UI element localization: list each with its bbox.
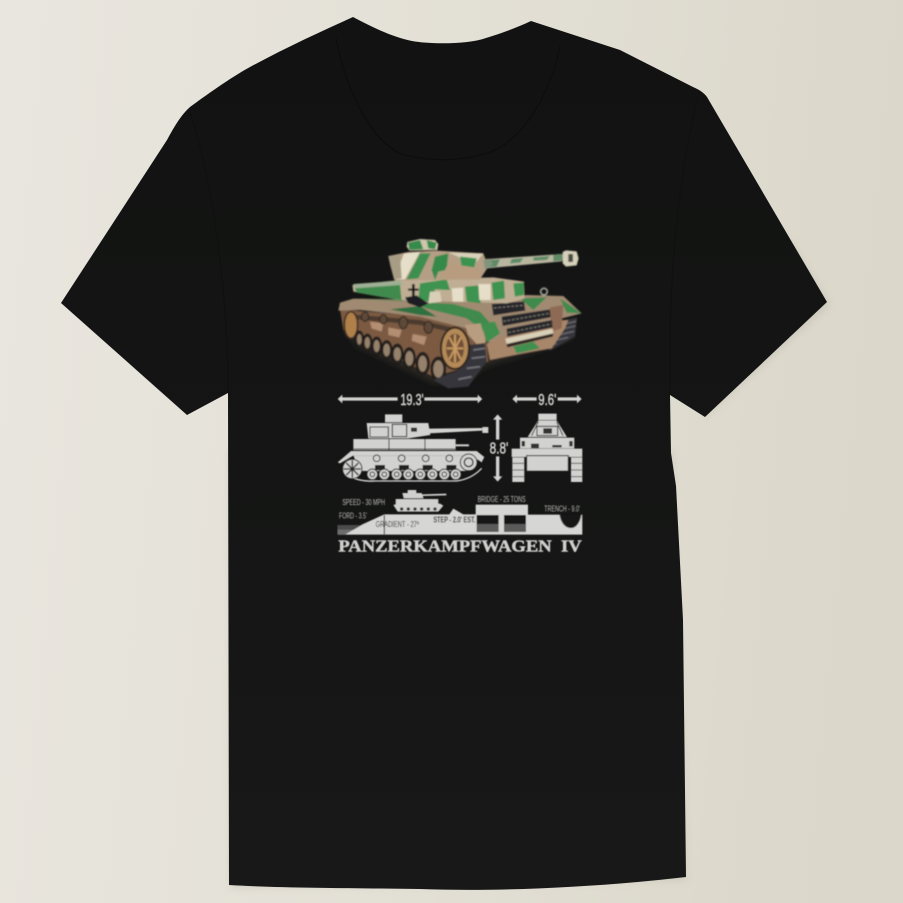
small tank silhouette: [393, 490, 446, 512]
hull superstructure: [352, 277, 525, 303]
road wheels: [355, 331, 446, 381]
muzzle brake: [563, 250, 579, 267]
side view tank: [338, 414, 488, 481]
drive sprocket: [441, 328, 469, 369]
label: step: STEP - 2.0' EST.: [433, 515, 475, 525]
dimension and side/front elevation drawings: [338, 392, 582, 482]
fender and deck: [338, 295, 582, 343]
balkenkreuz: [408, 284, 419, 296]
near track: [433, 343, 487, 388]
hull side shading: [347, 314, 463, 333]
front plate camouflage: [482, 322, 540, 353]
far track: [540, 317, 577, 351]
label: trench: TRENCH - 9.0': [544, 505, 580, 514]
under-tank fuzzy edge: [343, 313, 575, 383]
gradient dimension mark: [383, 515, 386, 534]
mantlet shade: [483, 258, 493, 269]
collar seam: [336, 38, 560, 160]
terrain profile: [338, 505, 582, 535]
left sleeve seam: [190, 112, 228, 393]
height label: 8.8': [490, 441, 508, 458]
water: ford: [338, 525, 362, 535]
label: ford: FORD - 3.5': [339, 511, 367, 520]
hull hatch: [405, 295, 428, 307]
deck dark green patch: [390, 306, 437, 317]
front view tank: [512, 414, 582, 482]
width label: 9.6': [538, 392, 556, 409]
grille highlights: [494, 305, 551, 333]
tan side plate: [465, 323, 486, 344]
lower hull brown: [340, 309, 488, 377]
bridge gap water: [477, 515, 526, 532]
road wheel hubs: [357, 334, 443, 378]
label: gradient: GRADIENT - 27º: [376, 520, 419, 529]
hull side marks: [370, 322, 427, 345]
deck green camouflage: [357, 297, 582, 333]
brown nose detail: [550, 305, 563, 332]
label: bridge: BRIDGE - 25 TONS: [478, 495, 526, 504]
title: PANZERKAMPFWAGEN IV: [338, 536, 582, 555]
far track links: [543, 321, 576, 347]
front plate: [487, 320, 568, 360]
idler wheel: [344, 312, 358, 338]
turret: [388, 251, 488, 281]
capability diagram: [338, 490, 582, 555]
tow hook detail: [541, 288, 547, 295]
colour tank illustration: [338, 239, 582, 388]
trench cut: [560, 515, 581, 528]
shirt drop shadow: [229, 240, 830, 888]
return rollers: [361, 312, 433, 333]
arrow: width: [512, 395, 582, 403]
muzzle brake slot: [568, 254, 573, 262]
right sleeve seam: [670, 96, 698, 395]
gun barrel: [483, 254, 562, 268]
engine grilles: [492, 301, 553, 337]
arrow: length: [338, 395, 482, 403]
length label: 19.3': [400, 392, 424, 409]
cupola: [407, 239, 438, 251]
label: speed: SPEED - 30 MPH: [342, 498, 385, 507]
cream bar: [505, 329, 553, 344]
near track links: [458, 348, 485, 379]
arrow: height: [493, 414, 502, 482]
